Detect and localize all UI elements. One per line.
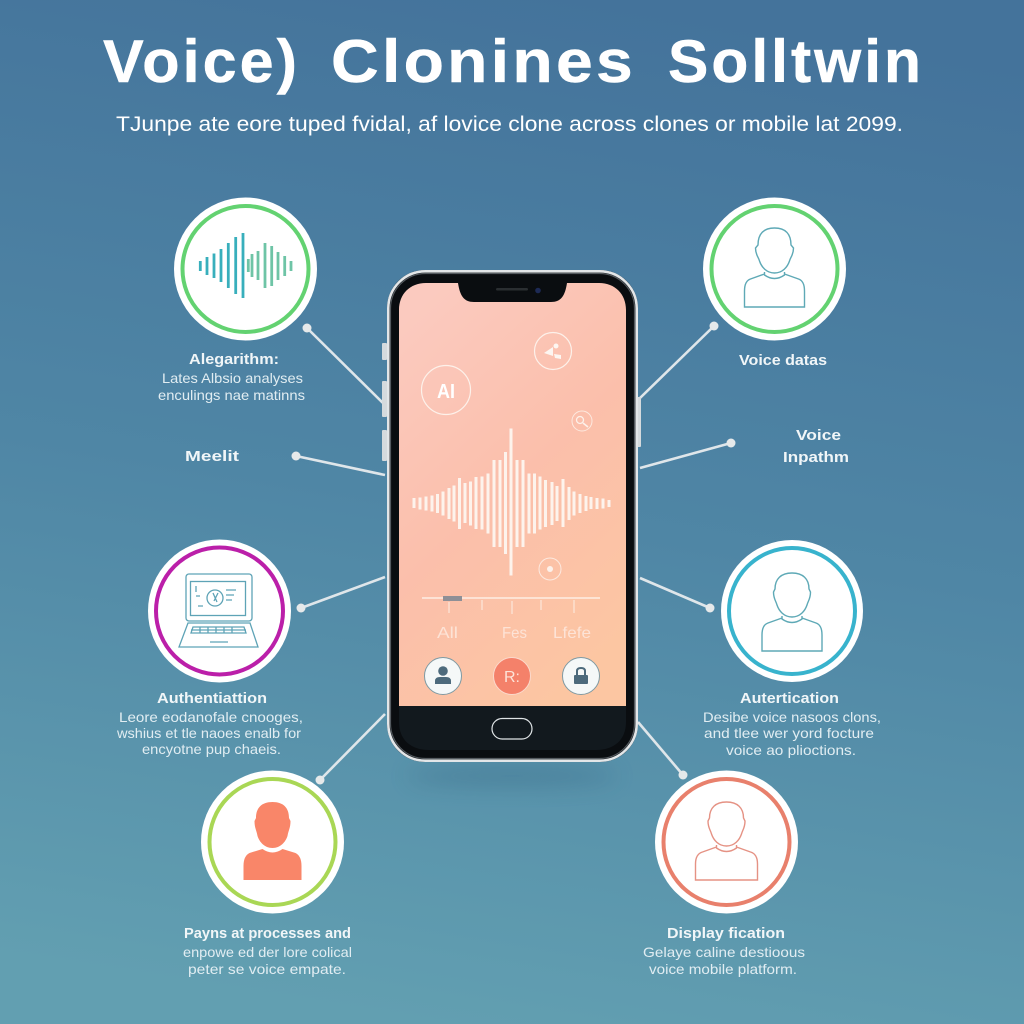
description line 3: encyotne pup chaeis. [142, 741, 281, 757]
icon: person outline in coral ring [655, 770, 798, 914]
description: Gelaye caline destioous [643, 944, 805, 960]
screen labels: All [437, 625, 458, 642]
description: enpowe ed der lore colical [183, 944, 352, 960]
heading: Authentiattion [157, 690, 267, 707]
screen labels: Fes [502, 625, 527, 642]
description: Leore eodanofale cnooges, [119, 709, 303, 725]
button: record [494, 658, 530, 694]
screen labels: Lfefe [553, 625, 591, 642]
icon: solid person in lime ring [201, 770, 344, 914]
description line 2: enculings nae matinns [158, 387, 305, 403]
screen icon: search [572, 411, 592, 431]
description line 2: and tlee wer yord focture [704, 725, 874, 741]
screen icon: small dot [539, 558, 561, 580]
screen labels [437, 625, 591, 642]
phone body [387, 270, 638, 762]
heading: Payns at processes and [184, 925, 351, 942]
heading: Autertication [740, 690, 839, 707]
icon: sound wave in green ring [174, 198, 317, 340]
screen icon: AI: AI [437, 381, 455, 403]
label: Voice Inpathm: Voice [796, 427, 841, 444]
button: record: R: [504, 669, 520, 686]
title: Voice) [103, 28, 300, 95]
panel: processes [183, 770, 352, 977]
panel: authentication left [116, 540, 303, 757]
description line 2: voice mobile platform. [649, 961, 797, 977]
heading: Voice datas [739, 352, 827, 369]
title [103, 28, 924, 95]
connector lines [292, 322, 736, 784]
description line 2: peter se voice empate. [188, 961, 346, 977]
heading: Alegarithm: [189, 351, 279, 368]
screen icon: share [534, 332, 572, 370]
icon: person outline in cyan ring [721, 540, 863, 682]
panel: algorithm [158, 198, 317, 403]
description line 3: voice ao plioctions. [726, 742, 856, 758]
screen [399, 283, 626, 706]
icon: person outline in green ring [703, 198, 846, 340]
phone [382, 270, 641, 762]
title: Clonines [331, 28, 636, 95]
label: Voice Inpathm [783, 427, 849, 466]
description line 2: wshius et tle naoes enalb for [116, 725, 301, 741]
waveform [414, 428, 609, 576]
heading: Display fication [667, 925, 785, 942]
subtitle: TJunpe ate eore tuped fvidal, af lovice clone across clones or mobile lat 2099. [116, 112, 903, 136]
panel: display [643, 770, 805, 977]
phone shadow [407, 767, 617, 785]
home button [492, 718, 532, 739]
icon: laptop in magenta ring [148, 540, 291, 682]
button: person [424, 658, 462, 694]
button: lock [562, 658, 600, 694]
slider [422, 596, 600, 614]
bottom bezel [399, 706, 626, 750]
speaker and camera [496, 288, 541, 293]
description: Desibe voice nasoos clons, [703, 709, 881, 725]
title: Solltwin [668, 28, 924, 95]
description: Lates Albsio analyses [162, 370, 303, 386]
screen icon: AI [422, 366, 470, 414]
panel: voice data [703, 198, 846, 369]
side buttons [382, 343, 641, 461]
label: Meelit: Meelit [185, 448, 239, 465]
label: Voice Inpathm: Inpathm [783, 449, 849, 466]
panel: authentication right [703, 540, 881, 758]
